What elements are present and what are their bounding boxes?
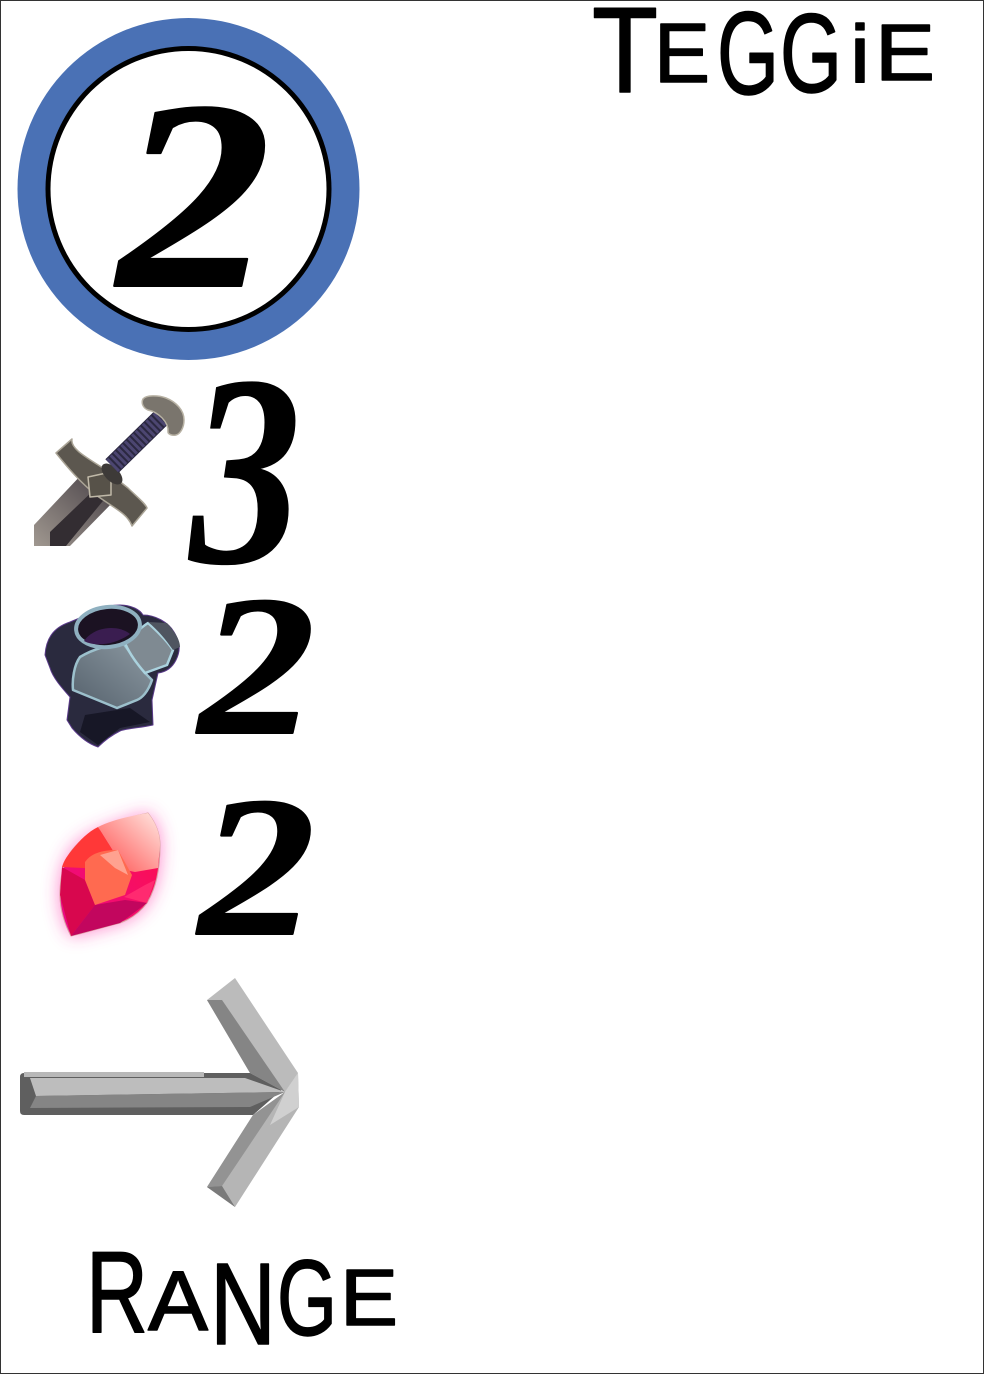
title: Teggie: E [654, 6, 710, 100]
label: range: E [340, 1253, 398, 1342]
icon: sword [34, 396, 184, 546]
label: range [86, 1227, 398, 1369]
title: Teggie: i [850, 9, 870, 100]
attack value: 3 [187, 320, 301, 621]
cost value: 2 [113, 46, 271, 345]
defense value: 2 [196, 556, 315, 777]
icon: stone arrow [20, 978, 299, 1207]
icon: armor [45, 604, 180, 747]
icon: ruby gem [60, 813, 160, 936]
title: Teggie [592, 0, 935, 120]
label: range: R [86, 1227, 148, 1357]
title: Teggie: E [875, 8, 935, 97]
label: range: N [210, 1239, 276, 1369]
magic value: 2 [196, 757, 315, 978]
label: range: G [277, 1237, 337, 1358]
cost badge [18, 18, 360, 360]
label: range: A [148, 1254, 208, 1348]
